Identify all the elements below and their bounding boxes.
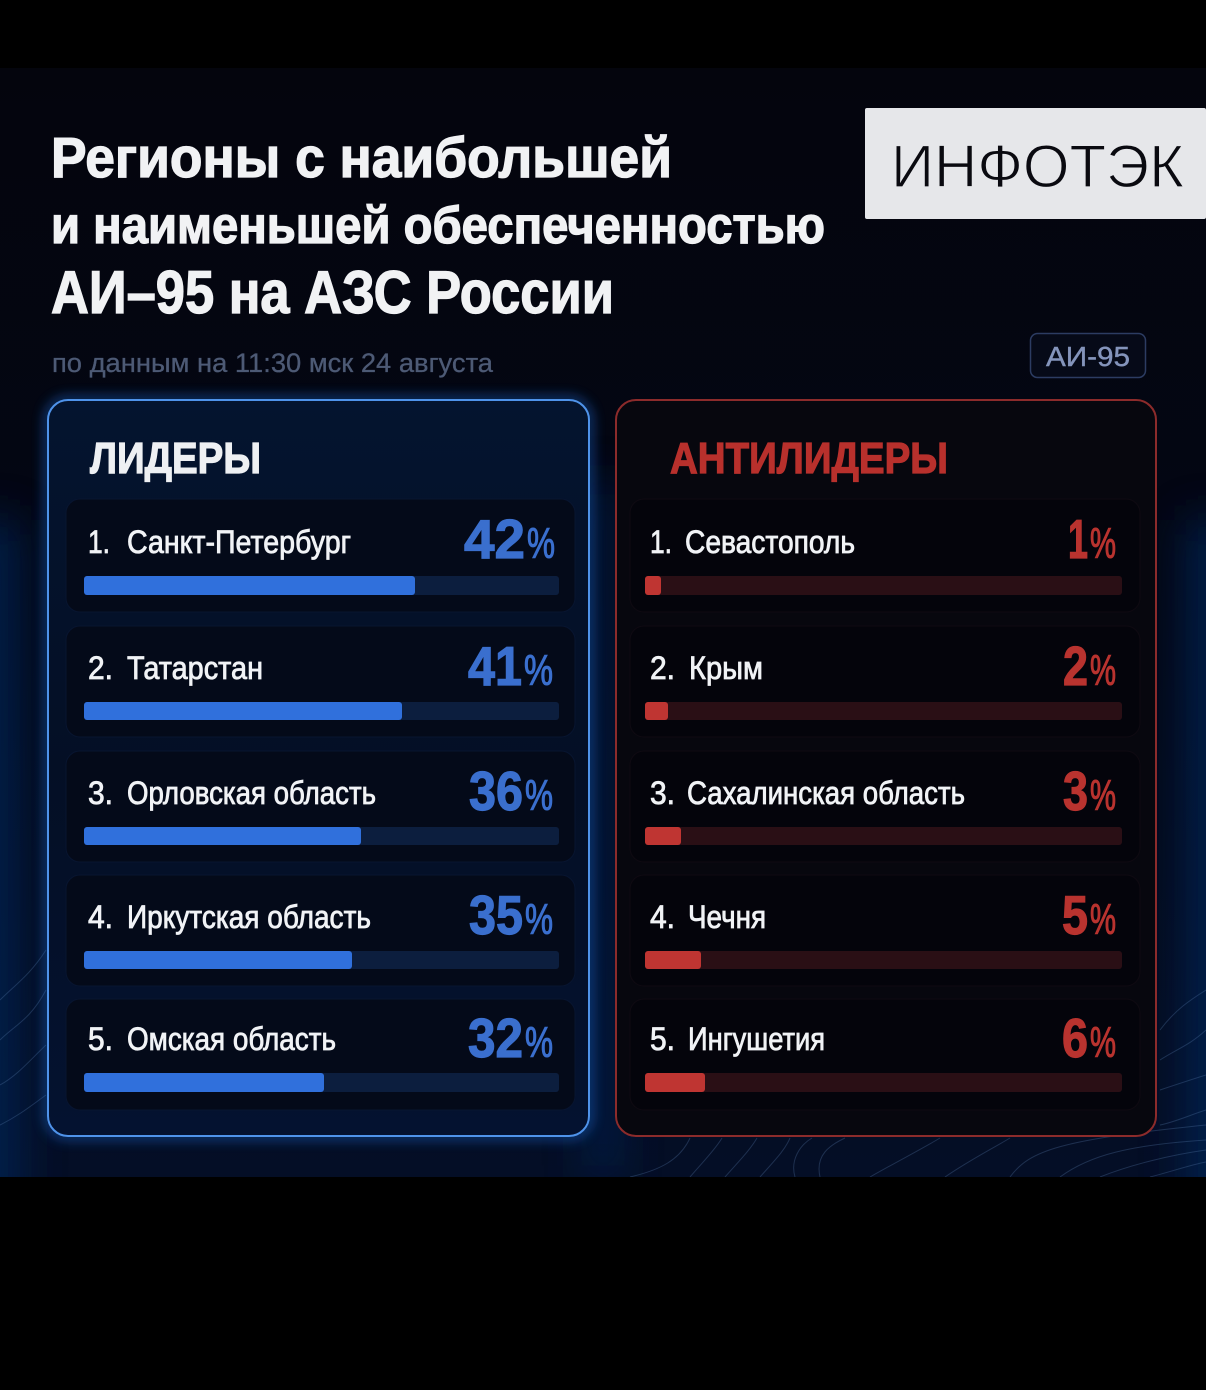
panel: leaders: [48, 400, 589, 1136]
heading: anti-leaders: АНТИЛИДЕРЫ: [670, 434, 948, 483]
row: Санкт-Петербург: 1.: [88, 524, 110, 560]
row: Татарстан: 2.: [88, 650, 113, 686]
row: Иркутская область: 4.: [88, 899, 113, 935]
row: Сахалинская область: Сахалинская область: [687, 775, 965, 811]
row: Татарстан: Татарстан: [127, 650, 263, 686]
row: Крым: 2.: [650, 650, 675, 686]
row: Чечня: 4.: [650, 899, 675, 935]
row: Омская область: [66, 999, 575, 1110]
heading: leaders: ЛИДЕРЫ: [90, 434, 261, 483]
row: Санкт-Петербург: 42: [464, 508, 525, 570]
row: Крым: Крым: [689, 650, 763, 686]
row: Сахалинская область: %: [1090, 772, 1116, 820]
row: Ингушетия: 5.: [650, 1021, 675, 1057]
row: Севастополь: [630, 499, 1140, 612]
row: Сахалинская область: 3.: [650, 775, 675, 811]
logo plate: [865, 108, 1206, 219]
row: Чечня: Чечня: [688, 899, 766, 935]
row: Ингушетия: %: [1090, 1019, 1116, 1067]
row: Санкт-Петербург: [66, 499, 575, 612]
subtitle: по данным на 11:30 мск 24 августа: [52, 348, 494, 378]
row: Крым: 2: [1063, 635, 1088, 697]
row: Санкт-Петербург: %: [527, 520, 555, 568]
row: Севастополь: Севастополь: [685, 524, 855, 560]
row: Орловская область: 36: [469, 760, 523, 822]
row: Орловская область: 3.: [88, 775, 113, 811]
fuel badge: [1030, 334, 1146, 378]
title: и наименьшей обеспеченностью: [51, 197, 825, 255]
fuel badge: АИ-95: [1046, 341, 1130, 372]
row: Крым: %: [1090, 647, 1116, 695]
row: Ингушетия: [630, 999, 1140, 1110]
row: Чечня: 5: [1062, 884, 1088, 946]
row: Татарстан: %: [524, 647, 553, 695]
row: Орловская область: [66, 751, 575, 862]
title: АИ–95 на АЗС России: [51, 259, 614, 326]
row: Сахалинская область: [630, 751, 1140, 862]
row: Чечня: %: [1090, 896, 1116, 944]
row: Севастополь: 1.: [650, 524, 672, 560]
panel: anti-leaders: [616, 400, 1156, 1136]
logo plate: ИНФОТЭК: [891, 133, 1184, 200]
title: [51, 126, 825, 326]
row: Орловская область: %: [525, 772, 553, 820]
row: Татарстан: 41: [468, 635, 522, 697]
row: Ингушетия: Ингушетия: [688, 1021, 825, 1057]
row: Иркутская область: 35: [469, 884, 523, 946]
row: Сахалинская область: 3: [1063, 760, 1088, 822]
row: Иркутская область: [66, 875, 575, 986]
title: Регионы с наибольшей: [51, 126, 672, 190]
row: Иркутская область: %: [525, 896, 553, 944]
row: Орловская область: Орловская область: [127, 775, 376, 811]
row: Чечня: [630, 875, 1140, 986]
row: Омская область: Омская область: [127, 1021, 336, 1057]
row: Севастополь: 1: [1068, 508, 1088, 570]
row: Санкт-Петербург: Санкт-Петербург: [127, 524, 351, 560]
row: Крым: [630, 626, 1140, 737]
row: Севастополь: %: [1090, 520, 1116, 568]
row: Татарстан: [66, 626, 575, 737]
row: Ингушетия: 6: [1062, 1007, 1088, 1069]
row: Иркутская область: Иркутская область: [127, 899, 371, 935]
row: Омская область: 5.: [88, 1021, 113, 1057]
row: Омская область: %: [525, 1019, 553, 1067]
row: Омская область: 32: [468, 1007, 523, 1069]
